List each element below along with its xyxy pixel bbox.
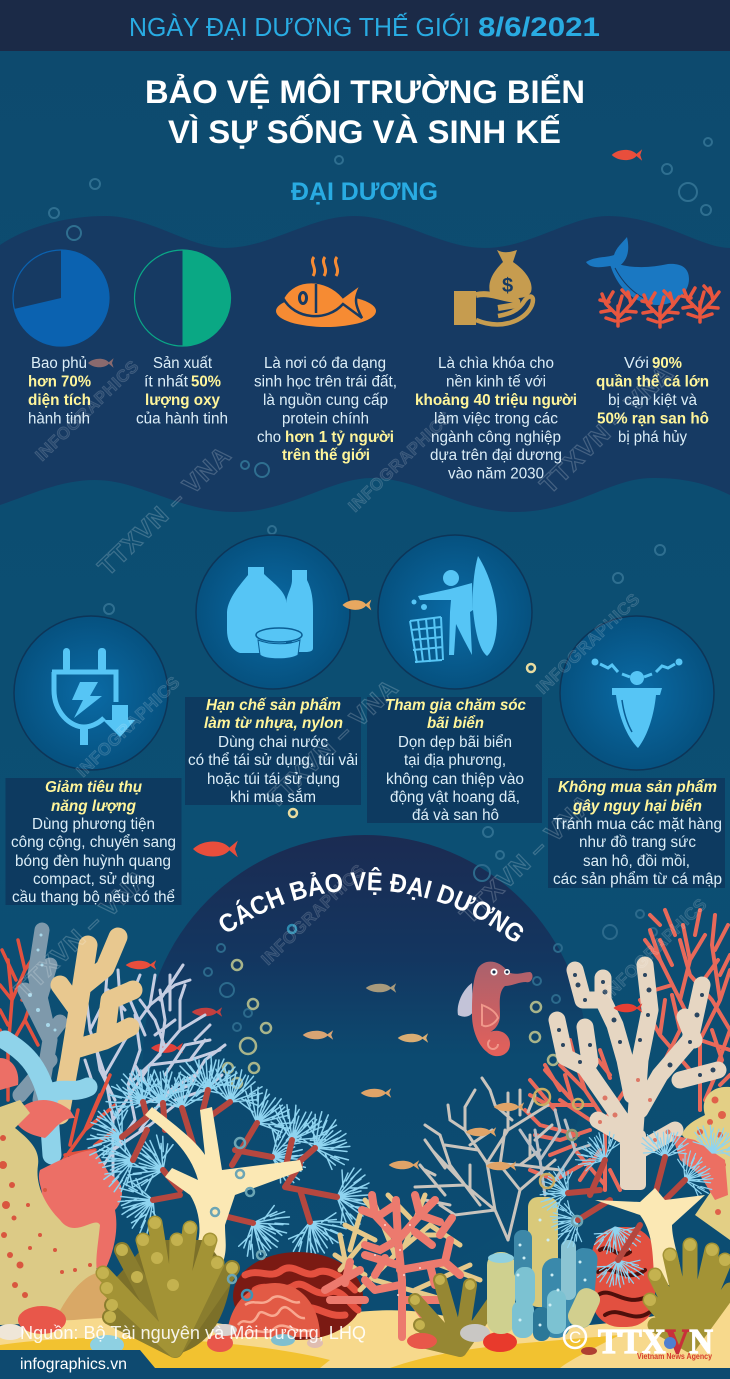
- text: biodiversity: Là nơi có đa dạng: [264, 355, 386, 372]
- watermarks: INFOGRAPHICS: [73, 672, 184, 781]
- text: covers 70 percent: hành tinh: [28, 410, 90, 428]
- coral: salmon and tan branch: [325, 1195, 480, 1337]
- panel: limit plastic: Hạn chế sản phẩm: [206, 697, 341, 714]
- icon: money hand: [454, 250, 533, 325]
- panel: beach care: Dọn dẹp bãi biển: [398, 734, 512, 751]
- panel: beach care: bãi biển: [427, 715, 484, 732]
- source: Nguồn: Bộ Tài nguyên và Môi trường, LHQ: [20, 1323, 366, 1343]
- text: overfishing: bị phá hủy: [618, 429, 687, 446]
- watermarks: INFOGRAPHICS: [345, 407, 456, 516]
- sand: [0, 1300, 730, 1368]
- watermarks: TTXVN – VNA: [260, 674, 404, 814]
- text: economy: khoảng 40 triệu người: [415, 392, 577, 409]
- footer bar: infographics.vn: [20, 1356, 127, 1373]
- text: biodiversity: sinh học trên trái đất,: [254, 374, 397, 390]
- panel: reduce energy: công cộng, chuyển sang: [11, 834, 176, 851]
- panel: reduce energy: bóng đèn huỳnh quang: [15, 853, 171, 870]
- coral: cream spotted staghorn: [557, 965, 718, 1190]
- panel: limit plastic: làm từ nhựa, nylon: [204, 715, 343, 732]
- panel: no harmful products: như đồ trang sức: [579, 834, 696, 851]
- text: covers 70 percent: diện tích: [28, 392, 91, 409]
- title: VÌ SỰ SỐNG VÀ SINH KẾ: [168, 114, 561, 150]
- panel: no harmful products: Tránh mua các mặt hàng: [553, 816, 722, 833]
- panel: no harmful products: san hô, đồi mồi,: [583, 853, 690, 870]
- panel: reduce energy: Dùng phương tiện: [32, 816, 155, 833]
- panel: limit plastic: Dùng chai nước: [218, 734, 328, 751]
- fishes: [126, 960, 428, 1170]
- text: overfishing: bị cạn kiệt và: [608, 392, 697, 409]
- coral: olive bush left: [97, 1217, 238, 1355]
- fish: big red: [193, 841, 238, 857]
- panel: reduce energy: năng lượng: [51, 798, 137, 815]
- icon: shark tooth necklace: [592, 658, 682, 748]
- text: economy: Là chìa khóa cho: [438, 355, 554, 372]
- coral: olive bush middle: [410, 1275, 495, 1350]
- text: economy: làm việc trong các: [434, 410, 558, 428]
- title: [145, 74, 585, 150]
- header bar: NGÀY ĐẠI DƯƠNG THẾ GIỚI: [129, 12, 470, 42]
- watermarks: TTXVN – VNA: [455, 789, 599, 929]
- panel: beach care: động vật hoang dã,: [390, 789, 520, 806]
- fish: red top: [612, 149, 642, 161]
- icon: pie 50 percent: [134, 250, 230, 346]
- icon: whale and coral: [586, 237, 719, 327]
- coral: sponges: [487, 1197, 603, 1341]
- fish: grey small: [88, 358, 114, 368]
- watermarks: TTXVN – VNA: [535, 359, 679, 499]
- panel: beach care: [367, 535, 542, 824]
- text: biodiversity: hơn 1 tỷ người: [285, 429, 394, 446]
- watermarks: INFOGRAPHICS: [258, 860, 369, 969]
- panel: limit plastic: khi mua sắm: [230, 789, 316, 806]
- heading: ocean: ĐẠI DƯƠNG: [291, 178, 438, 206]
- logo: TTXVN: Vietnam News Agency: [637, 1352, 712, 1361]
- panel: reduce energy: compact, sử dụng: [33, 871, 155, 888]
- blue rings on corals: [211, 1089, 583, 1300]
- coral: right red fan: [525, 910, 730, 1190]
- coral: grey-blue finger coral: [20, 930, 60, 1100]
- coral: salmon blobs: [0, 1058, 122, 1270]
- coral: left red branches: [0, 940, 115, 1165]
- coral: tree right: [535, 1120, 730, 1291]
- coral: tan mound with dots: [0, 1100, 135, 1325]
- icon: person with surfboard: [410, 556, 497, 663]
- text: produces 50 percent oxygen: ít nhất: [144, 374, 189, 390]
- fishes among corals: [466, 1003, 642, 1171]
- watermarks: TTXVN – VNA: [93, 441, 237, 581]
- text: biodiversity: trên thế giới: [282, 447, 370, 464]
- panel: no harmful products: gây nguy hại biển: [572, 798, 702, 815]
- panel: limit plastic: hoặc túi tái sử dụng: [207, 771, 340, 788]
- text: produces 50 percent oxygen: lượng oxy: [145, 392, 220, 409]
- coral: grey fans: [415, 1078, 590, 1240]
- icon: cooked fish: [276, 257, 376, 327]
- text: overfishing: quần thể cá lớn: [596, 374, 709, 390]
- coral: yellow spotted right: [682, 1087, 730, 1240]
- icon: money hand: $: [502, 275, 513, 297]
- wave band: [0, 216, 730, 512]
- panel: reduce energy: Giảm tiêu thụ: [45, 779, 143, 796]
- panel: beach care: không can thiệp vào: [386, 771, 524, 788]
- text: economy: [415, 355, 577, 482]
- text: produces 50 percent oxygen: Sản xuất: [153, 355, 213, 372]
- bubbles: [49, 138, 712, 859]
- text: economy: dựa trên đại dương: [430, 447, 562, 464]
- logo: TTXVN: TTXVN: [598, 1322, 713, 1361]
- panel: no harmful products: Không mua sản phẩm: [558, 779, 717, 796]
- text: overfishing: 90%: [652, 355, 682, 372]
- coral: tan staghorn: [60, 937, 133, 1115]
- rocks middle: [407, 1324, 597, 1355]
- coral: tree with fringes: [80, 1056, 371, 1267]
- text: produces 50 percent oxygen: 50%: [191, 374, 221, 390]
- coral: light blue: [5, 1040, 88, 1155]
- text: biodiversity: cho: [257, 429, 281, 446]
- title: BẢO VỆ MÔI TRƯỜNG BIỂN: [145, 74, 585, 110]
- panel: reduce energy: cầu thang bộ nếu có thể: [12, 889, 175, 906]
- rocks left: [0, 1306, 323, 1355]
- dome: [143, 835, 587, 1279]
- text: economy: ngành công nghiệp: [431, 429, 561, 446]
- text: overfishing: [596, 355, 709, 446]
- rings: [204, 664, 657, 1088]
- panel: limit plastic: có thể tái sử dụng, túi vải: [188, 752, 358, 769]
- text: covers 70 percent: [28, 355, 91, 428]
- text: produces 50 percent oxygen: của hành tinh: [136, 410, 228, 428]
- icon: plastic containers: [227, 567, 313, 659]
- text: overfishing: Với: [624, 355, 649, 372]
- icon: pie 70 percent: [13, 250, 109, 346]
- footer bar: [0, 1350, 730, 1379]
- watermarks: INFOGRAPHICS: [533, 589, 644, 698]
- logo: TTXVN: C: [569, 1328, 581, 1347]
- panel: no harmful products: [548, 616, 725, 888]
- text: economy: nền kinh tế với: [446, 374, 546, 390]
- watermarks: [10, 356, 711, 1004]
- coral: salmon star right: [672, 1135, 728, 1200]
- text: biodiversity: là nguồn cung cấp: [263, 392, 388, 409]
- panel: no harmful products: các sản phẩm từ cá mập: [553, 871, 722, 888]
- icon: plug: [52, 648, 135, 745]
- text: economy: vào năm 2030: [448, 466, 544, 482]
- header bar: [0, 0, 730, 51]
- text: covers 70 percent: Bao phủ: [31, 355, 87, 372]
- coral: brain coral left: [227, 1252, 363, 1340]
- panel: limit plastic: [185, 535, 361, 806]
- watermarks: INFOGRAPHICS: [32, 356, 143, 465]
- text: overfishing: 50% rạn san hô: [597, 410, 709, 428]
- seahorse: [458, 962, 533, 1056]
- watermarks: INFOGRAPHICS: [600, 894, 711, 1003]
- heading: how to protect: CÁCH BẢO VỆ ĐẠI DƯƠNG: [220, 867, 524, 942]
- panel: beach care: Tham gia chăm sóc: [385, 697, 526, 714]
- panel: reduce energy: [6, 616, 182, 906]
- header bar: 8/6/2021: [478, 12, 600, 42]
- fish: orange middle: [342, 600, 371, 610]
- text: produces 50 percent oxygen: [136, 355, 228, 428]
- coral: brain coral right: [592, 1227, 655, 1327]
- coral: olive bush right: [644, 1239, 730, 1345]
- panel: beach care: đá và san hô: [412, 807, 499, 824]
- coral: lilac fan left: [85, 965, 225, 1190]
- text: biodiversity: [254, 355, 397, 464]
- watermarks: TTXVN – VNA: [10, 864, 154, 1004]
- panel: beach care: tại địa phương,: [404, 752, 506, 769]
- text: covers 70 percent: hơn 70%: [28, 374, 91, 390]
- text: biodiversity: protein chính: [282, 410, 369, 428]
